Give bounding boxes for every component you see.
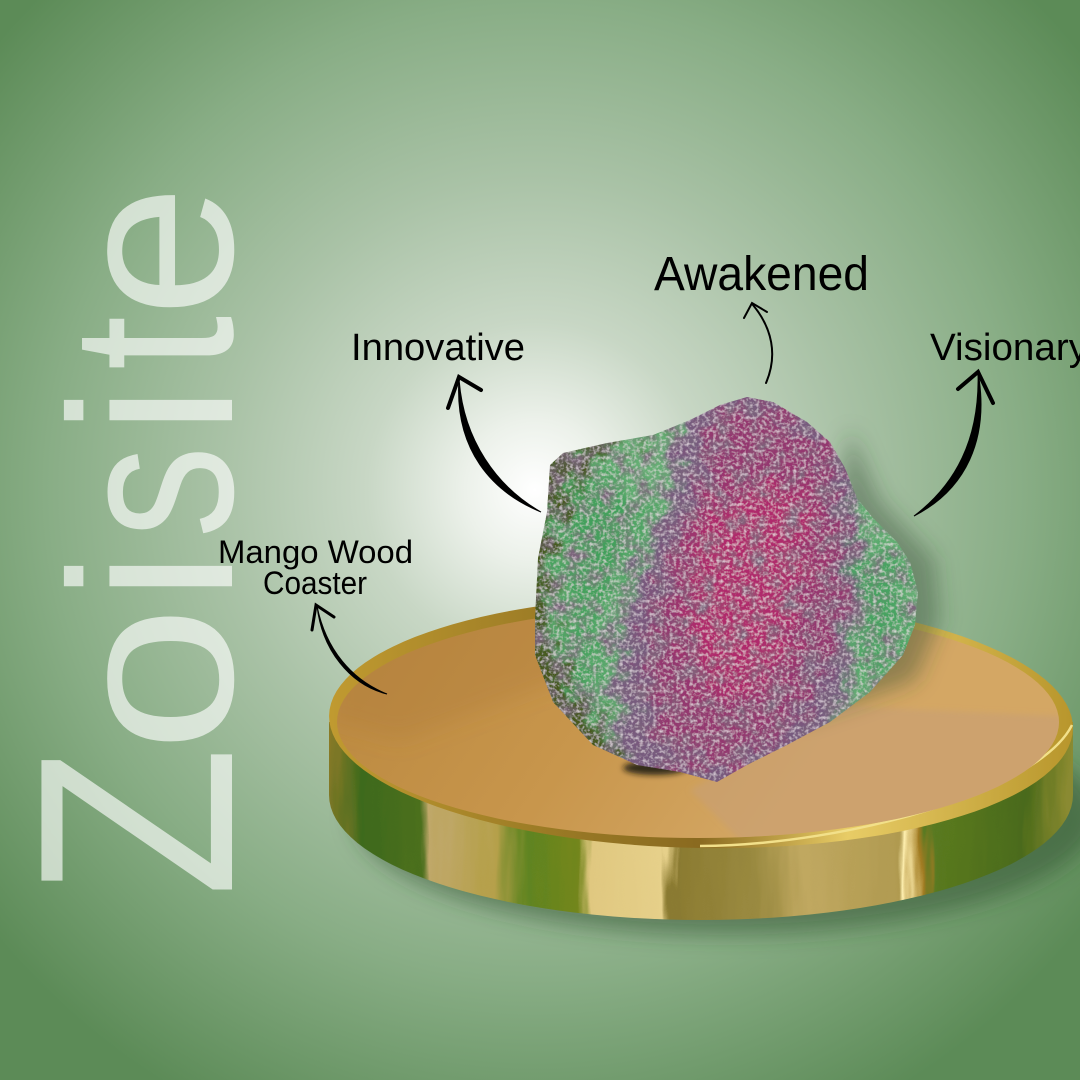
title: Zoisite <box>0 185 291 897</box>
rock hot pink streaks <box>685 480 815 700</box>
coaster: mango wood with brass rim <box>300 590 1080 940</box>
rock base green <box>536 422 918 759</box>
rock contact shadow <box>623 761 687 775</box>
rock magenta core <box>645 400 845 770</box>
title: Zoisite: e <box>22 185 281 317</box>
rock moss edge <box>535 430 668 758</box>
label: Innovative: Innovative <box>351 327 525 369</box>
arrow: to Visionary <box>914 372 993 516</box>
coaster brass rim <box>327 590 1075 854</box>
title: Zoisite: i <box>23 550 282 602</box>
coaster wood top <box>337 606 1059 838</box>
arrow: to Innovative <box>448 377 541 512</box>
wood lighter plank <box>330 590 1062 860</box>
rock green saturated <box>560 470 645 720</box>
arrow: to Mango Wood Coaster <box>312 605 387 694</box>
title: Zoisite: o <box>22 605 281 753</box>
arrow: to Awakened <box>744 303 772 383</box>
title: Zoisite: s <box>22 446 282 538</box>
coaster bright rim edge <box>700 725 1072 846</box>
coaster brass side <box>329 722 1073 920</box>
label: Awakened: Awakened <box>654 248 869 301</box>
title: Zoisite: i <box>23 384 282 436</box>
rock grey-purple zone <box>615 360 862 820</box>
label: Mango Wood Coaster: Mango Wood <box>218 534 413 570</box>
rock shadow <box>800 430 940 720</box>
coaster cast shadow <box>353 695 1080 935</box>
label: Mango Wood Coaster: Coaster <box>263 565 367 601</box>
label: Mango Wood Coaster <box>218 534 413 601</box>
title: Zoisite: t <box>22 316 282 370</box>
zoisite rock <box>535 397 918 782</box>
